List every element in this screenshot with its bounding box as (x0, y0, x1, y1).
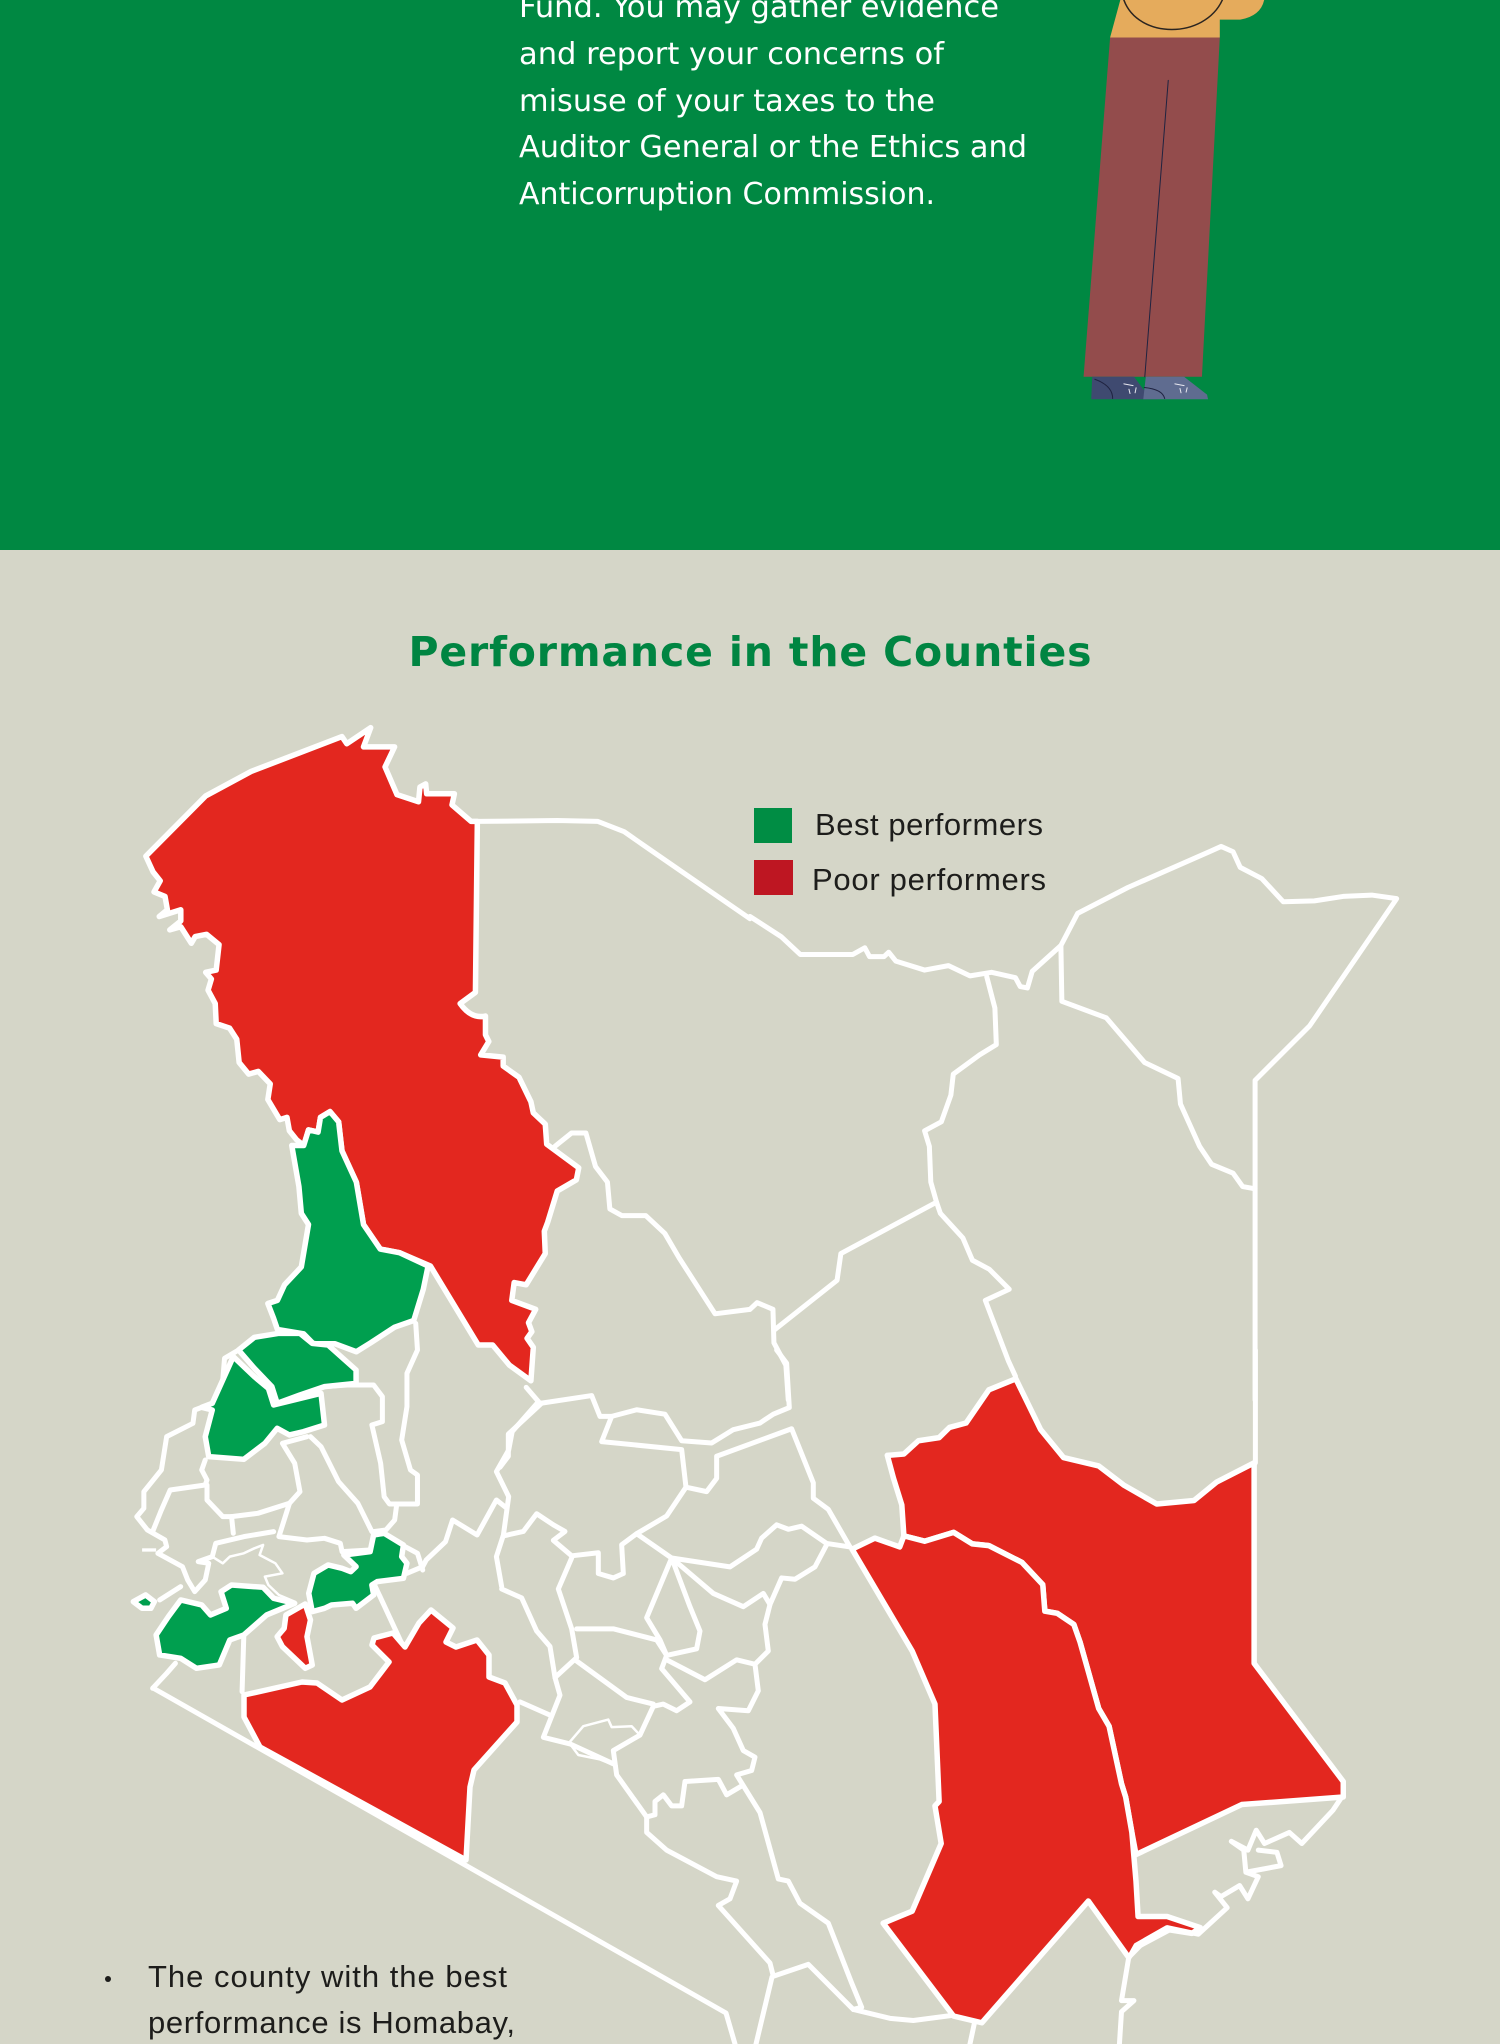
text block: best county bullet (105, 1959, 515, 2040)
county lines: south border (153, 1688, 772, 2044)
text block: report misuse of taxes (519, 0, 1027, 212)
text block: report misuse of taxes: Auditor General or the Ethics and (519, 130, 1027, 165)
legend label: best performers: Best performers (815, 807, 1043, 842)
county lines: central and southern (500, 1350, 975, 2044)
county: Homabay best performer (156, 1585, 295, 1668)
heading: performance in the counties: Performance in the Counties (408, 628, 1092, 676)
text block: report misuse of taxes: misuse of your taxes to the (519, 84, 935, 119)
icon: standing person illustration (1084, 0, 1264, 399)
text block: report misuse of taxes: Anticorruption Commission. (519, 177, 935, 212)
county lines: Kenyan coast (1119, 1795, 1343, 2044)
legend swatch: best performers (754, 808, 792, 843)
border line: eastern frontier above Garissa (1253, 1350, 1258, 1463)
county: Tana River poor performer (852, 1532, 1200, 2023)
county: Kisii poor performer (277, 1604, 312, 1668)
south east counties: poor performers (852, 1350, 1343, 2044)
county: Kericho best performer (309, 1533, 407, 1612)
county: Trans Nzoia best performer (239, 1333, 356, 1403)
bullet marker (105, 1976, 111, 1982)
panel: green tax reporting section (0, 0, 1500, 550)
county lines: western counties (133, 1323, 539, 1692)
county: West Pokot best performer (268, 1112, 428, 1352)
county: Bungoma best performer (202, 1357, 325, 1459)
bullet text: The county with the best (148, 1959, 507, 1994)
bullet text continued: performance is Homabay, (148, 2005, 515, 2040)
map: Kenya counties (133, 728, 1397, 2044)
legend swatch: poor performers (754, 860, 793, 895)
green panel background (0, 0, 1500, 550)
legend label: poor performers: Poor performers (812, 862, 1046, 897)
county: Garissa poor performer (887, 1379, 1343, 1855)
county: Narok poor performer (244, 1610, 517, 1860)
county lines: northern frontier (477, 821, 750, 1314)
county: Turkana poor performer (146, 728, 579, 1381)
legend (754, 807, 1046, 897)
text block: report misuse of taxes: and report your concerns of (519, 37, 945, 72)
western counties: best and poor performers (156, 1333, 407, 1668)
county lines: north and east (750, 846, 1397, 1400)
